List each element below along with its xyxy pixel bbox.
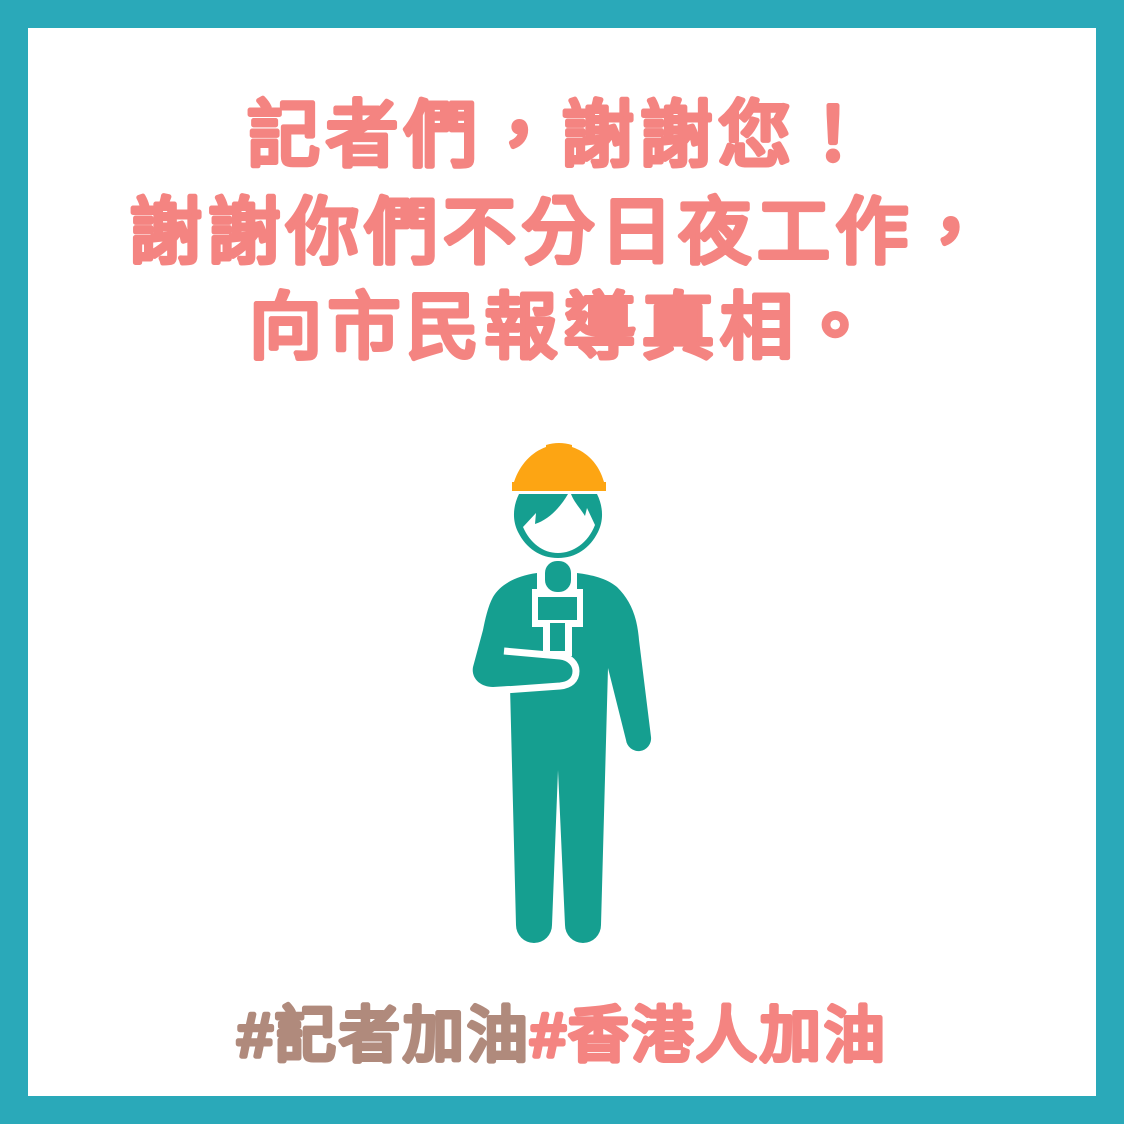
- hashtag: Hong Kong people: #香港人加油: [531, 1001, 888, 1069]
- title: [129, 95, 992, 368]
- icon: head and hair: [514, 494, 602, 558]
- hashtag: journalists: #記者加油: [238, 1001, 531, 1069]
- reporter figure: [473, 443, 651, 943]
- icon: helmet: [512, 443, 606, 491]
- title: 謝謝你們不分日夜工作，: [129, 192, 992, 273]
- icon: forearm outline: [504, 651, 576, 690]
- title: 向市民報導真相。: [249, 287, 877, 368]
- title: 記者們，謝謝您！: [247, 95, 875, 176]
- icon: body: [473, 573, 651, 943]
- icon: microphone body: [538, 597, 577, 620]
- icon: microphone handle: [550, 623, 565, 651]
- icon: microphone frame cut-out: [532, 589, 583, 656]
- icon: microphone head: [545, 561, 571, 592]
